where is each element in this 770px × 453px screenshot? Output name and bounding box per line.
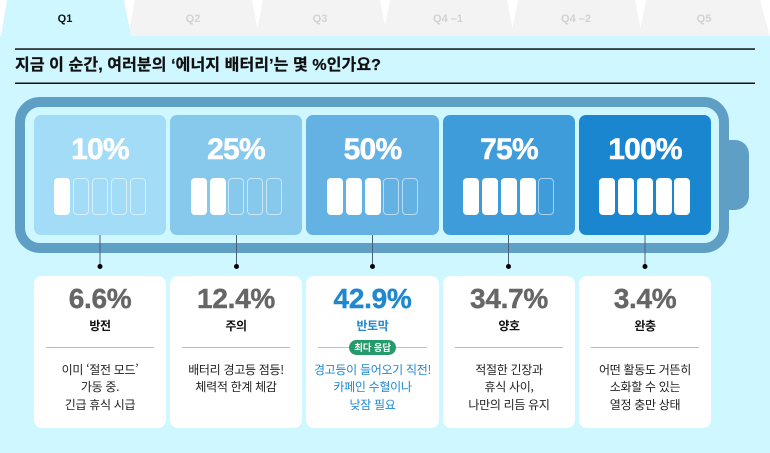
panel: 25%: 25%	[207, 133, 265, 166]
card: 완충: 소화할 수 있는	[610, 378, 680, 395]
card: 반토막: 최다 응답	[354, 340, 391, 354]
card: 방전	[34, 276, 166, 428]
tab bar: Q3	[313, 13, 327, 25]
card: 주의: 12.4%	[197, 283, 275, 314]
card: 반토막: 경고등이 들어오기 직전!	[314, 361, 431, 378]
card: 완충	[579, 276, 711, 428]
card: 완충: 완충	[634, 317, 656, 334]
card: 방전: 긴급 휴식 시급	[65, 396, 135, 413]
panel: 75%	[443, 115, 575, 235]
card: 완충: 어떤 활동도 거뜬히	[599, 361, 691, 378]
card: 반토막: 42.9%	[334, 283, 411, 314]
card: 반토막: 낮잠 필요	[349, 396, 396, 413]
panel: 10%	[34, 115, 166, 235]
card: 반토막: 카페인 수혈이나	[333, 378, 412, 395]
panel: 50%: 50%	[344, 133, 401, 166]
card: 양호: 34.7%	[470, 283, 548, 314]
tab bar: Q5	[697, 13, 711, 25]
card: 양호	[443, 276, 575, 428]
card: 양호: 나만의 리듬 유지	[468, 396, 550, 413]
card: 반토막	[306, 276, 439, 428]
tab bar: Q4 –1	[433, 13, 463, 25]
title: 지금 이 순간, 여러분의 ‘에너지 배터리’는 몇 %인가요?	[15, 57, 381, 74]
tab bar: Q1	[58, 13, 72, 25]
card: 주의: 주의	[225, 317, 247, 334]
card: 방전: 6.6%	[69, 283, 131, 314]
card: 양호: 적절한 긴장과	[475, 361, 543, 378]
card: 주의	[170, 276, 302, 428]
card: 양호: 휴식 사이,	[484, 378, 534, 395]
tab bar	[1, 0, 770, 36]
card: 주의: 체력적 한계 체감	[195, 378, 277, 395]
panel: 75%: 75%	[480, 133, 538, 166]
battery cap	[729, 140, 749, 210]
card: 방전: 방전	[89, 317, 111, 334]
card: 완충: 열정 충만 상태	[610, 396, 680, 413]
panel: 10%: 10%	[71, 133, 129, 166]
card: 주의: 배터리 경고등 점등!	[188, 361, 284, 378]
panel: 25%	[170, 115, 302, 235]
battery body	[15, 97, 729, 253]
card: 반토막: 반토막	[357, 317, 388, 334]
panel: 100%: 100%	[608, 133, 682, 166]
card: 방전: 가동 중.	[81, 378, 119, 395]
card: 완충: 3.4%	[614, 283, 676, 314]
tab bar: Q2	[186, 13, 200, 25]
panel: 50%	[306, 115, 439, 235]
card: 양호: 양호	[498, 317, 520, 334]
card: 방전: 이미 ‘절전 모드’	[62, 361, 138, 378]
tab bar: Q4 –2	[561, 13, 591, 25]
panel: 100%	[579, 115, 711, 235]
